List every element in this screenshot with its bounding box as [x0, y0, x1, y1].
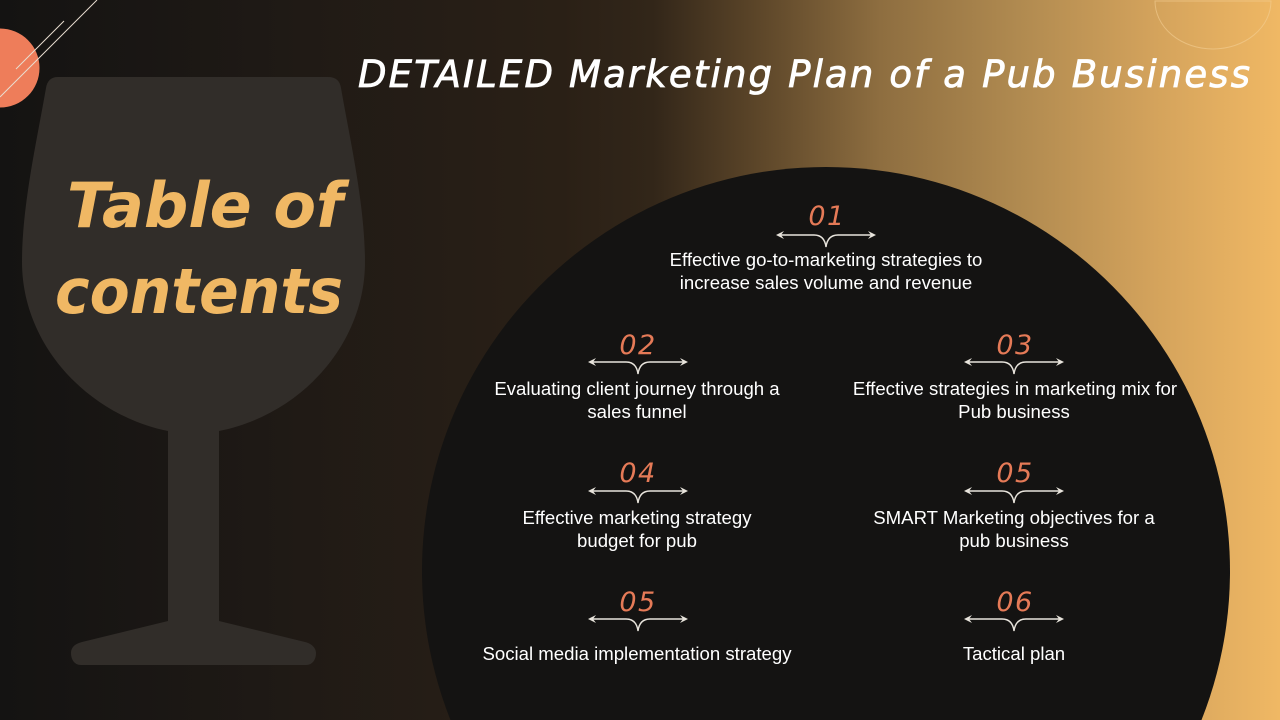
item 01: increase sales volume and revenue [680, 272, 972, 293]
item 01 [670, 201, 982, 293]
item 06 [963, 587, 1065, 664]
heading: table of contents [55, 169, 350, 328]
item 06: 06 [996, 587, 1034, 618]
item 03: Pub business [958, 401, 1070, 422]
item 04: budget for pub [577, 530, 697, 551]
item 03: 03 [996, 330, 1034, 361]
decorative orange circle with lines [0, 0, 97, 108]
item 05 left: 05 [619, 587, 657, 618]
icon: wine glass silhouette [22, 77, 365, 665]
heading: table of contents: contents [55, 255, 343, 328]
decorative outlined semicircle [1155, 1, 1271, 49]
item 01: 01 [808, 201, 846, 232]
item 04: Effective marketing strategy [522, 507, 752, 528]
item 06: Tactical plan [963, 643, 1065, 664]
item 02: sales funnel [587, 401, 687, 422]
item 02: 02 [619, 330, 657, 361]
item 02: Evaluating client journey through a [494, 378, 780, 399]
item 05 left [482, 587, 792, 664]
item 03 [853, 330, 1177, 422]
item 05 right: SMART Marketing objectives for a [873, 507, 1155, 528]
item 04: 04 [619, 458, 657, 489]
title: DETAILED Marketing Plan of a Pub Business [358, 53, 1250, 96]
item 05 right: 05 [996, 458, 1034, 489]
heading: table of contents: Table of [67, 169, 350, 242]
item 05 right [873, 458, 1155, 551]
item 05 right: pub business [959, 530, 1069, 551]
item 01: Effective go-to-marketing strategies to [670, 249, 982, 270]
item 02 [494, 330, 780, 422]
panel: contents circle [422, 167, 1230, 720]
item 05 left: Social media implementation strategy [482, 643, 792, 664]
item 04 [522, 458, 752, 551]
item 03: Effective strategies in marketing mix for [853, 378, 1177, 399]
